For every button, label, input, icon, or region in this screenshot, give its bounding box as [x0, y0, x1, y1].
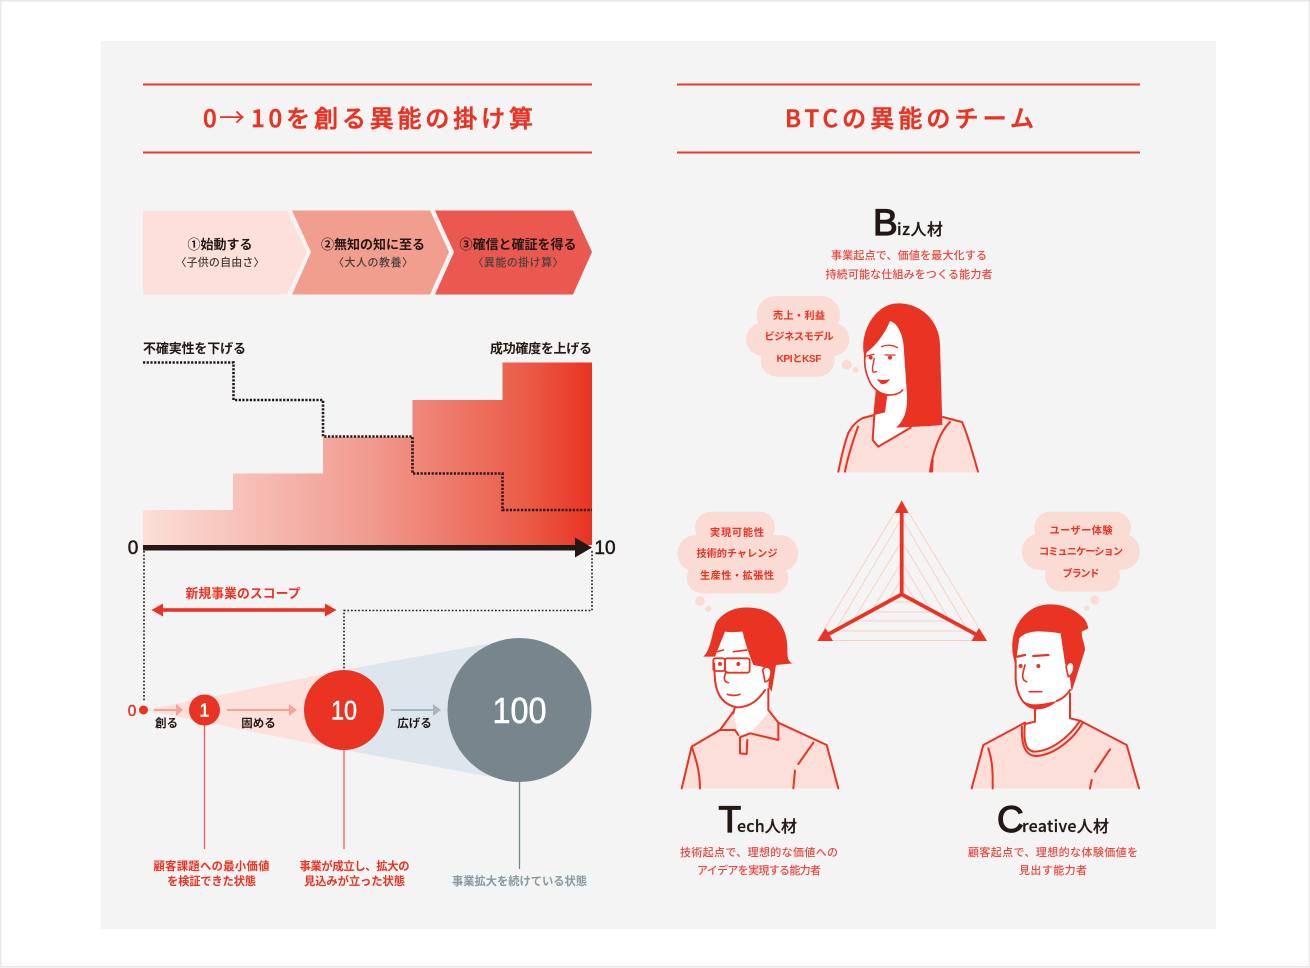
Biz description — [826, 248, 992, 281]
label: uncertainty: 不確実性を下げる — [143, 341, 246, 356]
Tech description: アイデアを実現する能力者 — [697, 863, 821, 877]
Tech thought bubble: 実現可能性 — [710, 526, 764, 539]
circle 1 — [189, 694, 220, 726]
axis label 10: 10 — [594, 538, 616, 559]
chevron 1 — [143, 210, 307, 294]
Tech heading — [718, 799, 797, 840]
caption: 10: 事業が成立し、拡大の — [300, 859, 410, 873]
chevron 3 — [435, 210, 592, 294]
Biz person illustration — [838, 303, 978, 472]
Biz heading — [873, 202, 943, 243]
caption: 1: を検証できた状態 — [167, 874, 256, 888]
stair chart — [128, 341, 616, 559]
Biz thought bubble: KPIとKSF — [776, 353, 822, 365]
axis arrows — [825, 510, 979, 636]
Tech thought bubble: 生産性・拡張性 — [700, 569, 774, 582]
cone: pink — [146, 670, 344, 750]
chevron 1: ①始動する — [187, 237, 253, 252]
radar triangle — [818, 500, 987, 641]
Creative heading: reative人材 — [1022, 813, 1109, 837]
Biz description: 持続可能な仕組みをつくる能力者 — [826, 267, 992, 281]
Creative person illustration — [972, 604, 1139, 788]
Biz thought bubble: 売上・利益 — [773, 309, 825, 322]
Tech heading: ech人材 — [737, 813, 797, 837]
Tech thought bubble — [677, 512, 798, 612]
Creative description: 顧客起点で、理想的な体験価値を — [968, 845, 1138, 859]
circle 1: 1 — [199, 700, 210, 720]
grid triangles — [818, 501, 986, 640]
caption: 1 — [154, 859, 270, 888]
three step chevrons — [143, 210, 592, 294]
Creative thought bubble — [1022, 512, 1140, 611]
growth diagram — [128, 638, 592, 888]
caption: 100: 事業拡大を続けている状態 — [452, 874, 587, 888]
Creative heading: C — [997, 799, 1024, 840]
Biz thought bubble — [746, 296, 859, 377]
Tech thought bubble: 技術的チャレンジ — [696, 547, 778, 560]
caption: 10: 見込みが立った状態 — [304, 874, 405, 888]
descending dotted line — [143, 362, 592, 510]
label: success probability: 成功確度を上げる — [490, 341, 592, 356]
circle 100: 100 — [492, 690, 546, 731]
label: create: 創る — [155, 716, 178, 730]
Creative thought bubble: ブランド — [1062, 567, 1100, 580]
caption: 1: 顧客課題への最小価値 — [154, 859, 270, 873]
circle 0: 0 — [128, 703, 137, 720]
Creative description: 見出す能力者 — [1019, 863, 1087, 877]
Tech heading: T — [718, 799, 741, 840]
Tech description: 技術起点で、理想的な価値への — [680, 845, 838, 859]
circle 10 — [304, 670, 384, 750]
Biz thought bubble: ビジネスモデル — [764, 330, 834, 343]
heading: right: BTCの異能のチーム — [785, 99, 1034, 134]
caption: 10 — [300, 859, 410, 888]
Creative thought bubble: ユーザー体験 — [1050, 524, 1113, 537]
heading: left — [143, 84, 592, 154]
Biz heading: iz人材 — [897, 216, 943, 240]
Tech person illustration — [682, 608, 838, 788]
leader lines — [204, 722, 520, 869]
scope arrow — [152, 586, 336, 616]
background panel — [101, 41, 1216, 929]
arrow: expand — [391, 704, 441, 716]
circle 0 — [128, 703, 148, 720]
heading: left: → — [219, 98, 245, 135]
axis label 0: 0 — [128, 538, 138, 559]
chevron 1: 〈子供の自由さ〉 — [176, 255, 264, 269]
circle 100 — [448, 638, 592, 782]
chevron 2: 〈大人の教養〉 — [333, 255, 413, 269]
Creative description — [968, 845, 1138, 877]
Creative heading — [997, 799, 1109, 840]
cone: blue — [344, 638, 519, 782]
arrow: create — [154, 704, 183, 716]
axis arrow — [143, 538, 592, 558]
dotted guide lines — [144, 551, 592, 702]
arrow: solidify — [227, 704, 297, 716]
Tech description — [680, 845, 838, 877]
heading: left: 10を創る異能の掛け算 — [251, 99, 533, 134]
scope label: 新規事業のスコープ — [186, 586, 301, 601]
chevron 2: ②無知の知に至る — [321, 237, 425, 252]
Creative thought bubble: コミュニケーション — [1039, 546, 1123, 558]
label: solidify: 固める — [241, 717, 276, 730]
Biz heading: B — [873, 202, 898, 243]
circle 10: 10 — [331, 696, 357, 726]
rising stairs — [143, 362, 592, 545]
chevron 3: ③確信と確証を得る — [459, 237, 577, 252]
heading: left: 0 — [203, 99, 217, 134]
chevron 3: 〈異能の掛け算〉 — [472, 255, 564, 269]
label: expand: 広げる — [397, 716, 432, 730]
Biz description: 事業起点で、価値を最大化する — [831, 248, 987, 262]
chevron 2 — [292, 210, 449, 294]
